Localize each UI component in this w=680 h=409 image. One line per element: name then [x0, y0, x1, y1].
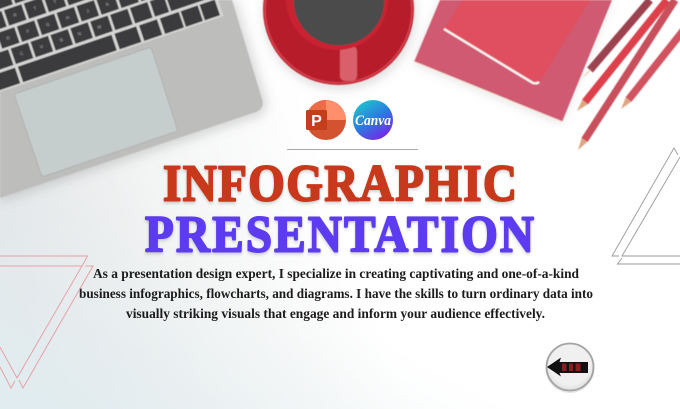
description text: visually striking visuals that engage and inform your audience effectively.: [126, 306, 545, 321]
triangle outline: gray: [612, 148, 680, 264]
logo badge: [546, 344, 594, 393]
icon: PowerPoint: [306, 100, 346, 140]
icon: Canva: Canva: [355, 113, 391, 129]
description text: business infographics, flowcharts, and diagrams. I have the skills to turn ordinary data into: [79, 286, 593, 301]
divider: [287, 149, 418, 150]
key letters: V: [39, 44, 44, 50]
key letters: F: [26, 28, 30, 34]
key letters: R: [13, 12, 18, 18]
laptop: [0, 0, 268, 203]
key letters: G: [45, 21, 51, 27]
key letters: C: [19, 50, 25, 56]
key letters: B: [59, 37, 64, 43]
notebooks: [414, 0, 612, 124]
description text: As a presentation design expert, I specialize in creating captivating and one-of-a-kind: [93, 266, 579, 281]
keyboard: [0, 0, 223, 108]
key letters: M: [97, 24, 102, 30]
description text: [79, 266, 593, 321]
title: Presentation: PRESENTATION: [145, 205, 534, 263]
pencils: [577, 0, 680, 150]
trackpad: [15, 48, 177, 176]
key letters: T: [33, 5, 37, 11]
key letters: J: [86, 8, 89, 14]
icon: PowerPoint: P: [311, 113, 322, 130]
triangle outline: red: [0, 256, 93, 388]
key letters: D: [6, 35, 11, 41]
key letters: N: [77, 31, 82, 37]
icon: Canva: [353, 100, 393, 140]
key letters: [0, 0, 116, 59]
key letters: K: [105, 1, 110, 7]
coffee cup and saucer: [263, 0, 416, 90]
title: Infographic: INFOGRAPHIC: [163, 154, 517, 212]
key letters: H: [65, 15, 70, 21]
